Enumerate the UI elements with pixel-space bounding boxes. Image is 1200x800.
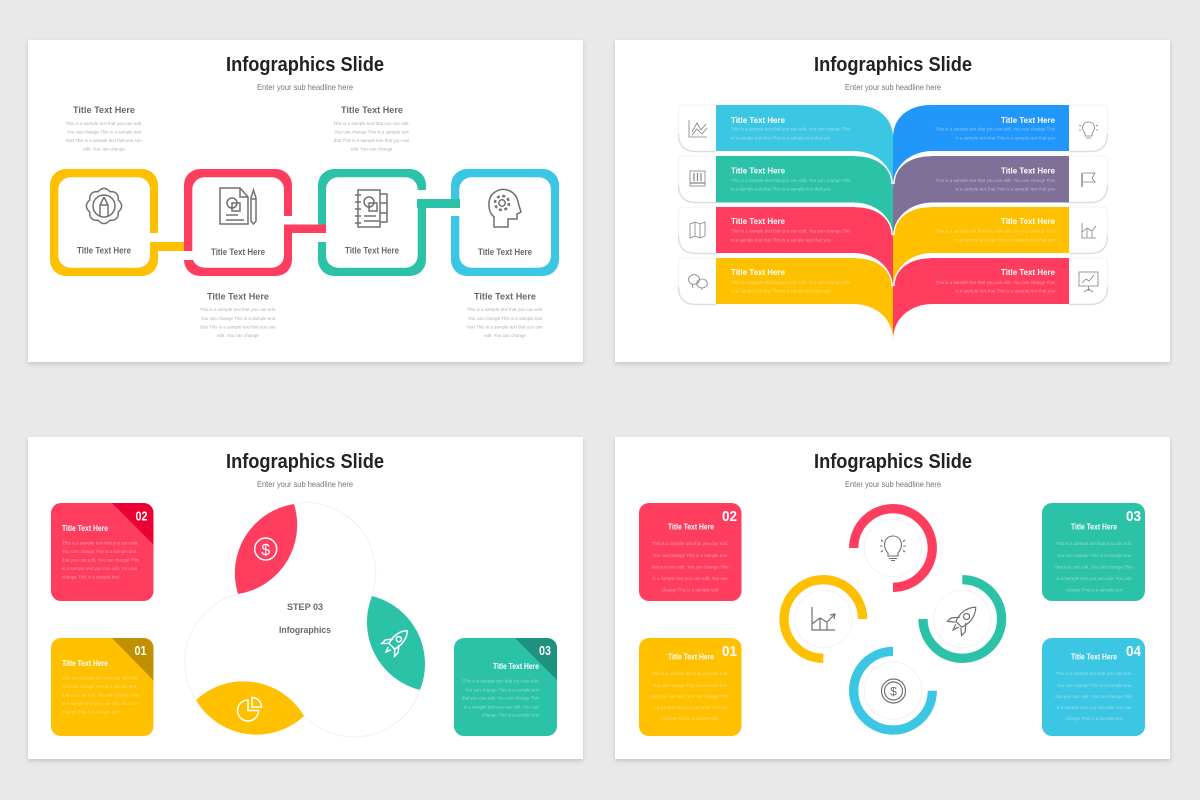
icon: map	[690, 222, 705, 238]
left ribbon text: Title Text Here	[731, 166, 785, 176]
card: 03	[1042, 503, 1145, 601]
card: step 03: This is a sample text that you can edit.	[462, 678, 539, 684]
text block: lower left: that This is a sample text that you can	[200, 324, 276, 330]
card: 03: This is a sample text that you can edit.	[1056, 541, 1132, 546]
title: Infographics Slide	[226, 451, 384, 473]
card: 01: Title Text Here	[668, 652, 714, 662]
text block: lower left: You can change This is a sample text	[201, 316, 276, 321]
text block: lower left: This is a sample text that you can edit.	[200, 307, 276, 312]
ribbon: red	[716, 207, 893, 289]
icon: pie chart	[238, 698, 262, 721]
text block: upper right: This is a sample text that you can edit.	[333, 121, 410, 126]
card: 04: is a sample text you can edit. You can	[1056, 705, 1132, 710]
card: step 01	[51, 638, 154, 736]
icon: chat bubbles	[688, 275, 707, 290]
icon: notebook	[355, 190, 387, 227]
card: 01: You can change This is a sample text	[653, 683, 728, 688]
panel: four rings	[615, 437, 1170, 759]
leaf: yellow	[196, 681, 304, 735]
title: Infographics Slide	[226, 54, 384, 76]
right ribbon text: is a sample text that This is a sample text that you	[956, 288, 1055, 294]
card: step 01: You can change This is a sample text	[62, 684, 137, 689]
icon: light bulb	[1079, 122, 1098, 138]
label: Title Text Here	[478, 247, 532, 257]
card: 01: is a sample text you can edit. You can	[652, 705, 728, 710]
card: 03: 03	[1126, 509, 1141, 525]
card: step 01: This is a sample text that you can edit.	[62, 676, 139, 680]
icon: head with gear	[489, 189, 521, 227]
panel: connected squares process	[28, 40, 583, 362]
card: 02: is a sample text you can edit. You can	[652, 576, 728, 581]
step: red square	[183, 169, 326, 276]
circle outlines	[185, 503, 420, 737]
card: 02: change This is a sample text	[662, 588, 719, 592]
card: 02: This is a sample text that you can edit.	[652, 541, 728, 546]
card: 01: that you can edit. You can change This	[651, 694, 729, 699]
card: step 02: This is a sample text that you can edit.	[62, 540, 139, 546]
text block: lower right: You can change This is a sample text	[468, 316, 543, 321]
icon: growth chart	[812, 607, 835, 630]
right ribbon text: Title Text Here	[1001, 115, 1055, 125]
card: 04: 04	[1126, 644, 1141, 660]
text block: upper left: You can change This is a sample text	[67, 130, 142, 134]
text block: upper right: edit. You can change	[351, 146, 393, 152]
card: 04: that you can edit. You can change This	[1055, 694, 1133, 699]
right ribbon text: is a sample text that This is a sample text that you	[956, 238, 1055, 242]
card: 03: is a sample text you can edit. You can	[1056, 576, 1132, 581]
right ribbon text: This is a sample text that you can edit. You can change This	[936, 126, 1056, 132]
label: Title Text Here	[77, 246, 131, 256]
card: 02: Title Text Here	[668, 522, 714, 532]
left icon tabs	[678, 105, 716, 304]
card: step 02: that you can edit. You can change This	[62, 558, 140, 562]
text block: lower left	[200, 292, 276, 338]
title: Infographics Slide	[814, 54, 972, 76]
card: step 03	[454, 638, 558, 736]
text block: upper right	[333, 105, 410, 152]
subtitle: Enter your sub headline here	[845, 479, 941, 489]
ring: red with bulb	[854, 509, 932, 587]
left ribbon text: This is a sample text that you can edit. You can change This	[731, 126, 851, 132]
card: 03: that you can edit. You can change This	[1055, 564, 1133, 570]
step: yellow square	[50, 169, 192, 276]
label: Title Text Here	[211, 247, 265, 257]
text block: upper right: You can change This is a sample text	[334, 130, 409, 134]
card: step 01: change This is a sample text	[62, 710, 120, 714]
ribbon: blue	[893, 105, 1069, 187]
text block: lower right: edit. You can change	[484, 333, 526, 338]
card: 01	[639, 638, 742, 736]
panel: book-style ribbon list	[615, 40, 1170, 362]
icon: flag	[1082, 173, 1095, 187]
card: 01: 01	[722, 644, 737, 660]
icon: rocket	[380, 624, 414, 658]
icon: rocket	[946, 600, 983, 637]
card: step 03: that you can edit. You can change This	[462, 696, 540, 700]
icon: document and pencil	[220, 188, 256, 224]
text block: lower left: edit. You can change	[217, 333, 259, 338]
right ribbon text: This is a sample text that you can edit. You can change This	[936, 280, 1056, 285]
step: teal square	[284, 169, 459, 276]
icon: sliders	[690, 171, 705, 186]
card: step 02: 02	[136, 510, 148, 524]
card: 02	[639, 503, 742, 601]
card: step 02	[51, 503, 154, 601]
step: blue square	[450, 169, 559, 276]
card: 03: Title Text Here	[1071, 522, 1117, 532]
text block: upper left: This is a sample text that you can edit.	[66, 121, 142, 126]
left ribbon text: Title Text Here	[731, 216, 785, 226]
card: step 03: You can change This is a sample text	[465, 688, 540, 692]
center label: STEP 03	[287, 602, 323, 612]
left ribbon text: is a sample text that This is a sample text that you	[731, 238, 831, 242]
card: step 02: is a sample text you can edit. You can	[62, 566, 138, 571]
label: Title Text Here	[345, 246, 399, 256]
card: 01: This is a sample text that you can edit.	[652, 671, 728, 676]
card: step 03: change This is a sample text	[482, 712, 540, 718]
subtitle: Enter your sub headline here	[257, 82, 353, 92]
text block: upper left: that This is a sample text that you can	[66, 138, 142, 143]
ring: teal with rocket	[923, 580, 1002, 658]
left ribbon text: is a sample text that This is a sample text that you	[731, 288, 831, 294]
card: 04: Title Text Here	[1071, 652, 1117, 662]
left ribbon text: This is a sample text that you can edit. You can change This	[731, 280, 851, 285]
left ribbon text: This is a sample text that you can edit. You can change This	[731, 228, 851, 234]
left ribbon text: This is a sample text that you can edit. You can change This	[731, 178, 851, 183]
subtitle: Enter your sub headline here	[257, 479, 353, 489]
card: 02: that you can edit. You can change This	[651, 564, 729, 570]
text block: upper left	[66, 105, 142, 152]
ring: cyan with coin	[854, 651, 932, 730]
card: step 02: You can change This is a sample text	[62, 549, 137, 554]
card: 03: change This is a sample text	[1066, 588, 1123, 592]
right ribbon text: is a sample text that This is a sample text that you	[956, 186, 1055, 192]
text block: lower right: This is a sample text that you can edit.	[467, 307, 543, 312]
text block: upper right: that This is a sample text that you can	[334, 138, 410, 143]
left ribbon text: is a sample text that This is a sample text that you	[731, 136, 831, 140]
panel: three-circle diagram	[28, 437, 583, 759]
left ribbon text: Title Text Here	[731, 115, 785, 125]
card: step 01: Title Text Here	[62, 658, 108, 668]
ribbon: cyan	[716, 105, 893, 187]
text block: lower right: Title Text Here	[474, 292, 536, 302]
right icon tabs	[1069, 105, 1108, 304]
title: Infographics Slide	[814, 451, 972, 473]
right ribbon text: is a sample text that This is a sample text that you	[956, 136, 1055, 140]
card: step 03: 03	[539, 644, 551, 658]
card: 03: You can change This is a sample text	[1057, 553, 1132, 558]
center label: Infographics	[279, 625, 331, 635]
card: step 03: is a sample text you can edit. You can	[464, 704, 539, 710]
right ribbon text: This is a sample text that you can edit. You can change This	[936, 228, 1056, 234]
card: 04: change This is a sample text	[1066, 716, 1123, 721]
card: step 01: is a sample text you can edit. You can	[62, 701, 138, 706]
icon: presentation board	[1079, 272, 1098, 292]
leaf: red	[235, 504, 297, 594]
ribbon: rose	[893, 258, 1069, 340]
icon: line chart	[689, 120, 707, 137]
ribbon: gold	[893, 207, 1069, 289]
card: step 02: Title Text Here	[62, 523, 108, 533]
ribbon: teal	[716, 156, 893, 238]
right ribbon text: This is a sample text that you can edit. You can change This	[936, 178, 1056, 183]
icon: dollar	[255, 538, 277, 560]
ribbon: yellow	[716, 258, 893, 340]
card: 04: You can change This is a sample text	[1057, 683, 1132, 688]
icon: bulb	[880, 536, 906, 560]
card: step 01: 01	[134, 644, 147, 658]
right ribbon text: Title Text Here	[1001, 216, 1055, 226]
text block: lower right: that This is a sample text that you can	[467, 324, 543, 330]
card: 02: You can change This is a sample text	[653, 553, 728, 558]
subtitle: Enter your sub headline here	[845, 82, 941, 92]
card: step 02: change This is a sample text	[62, 574, 120, 580]
card: 04	[1042, 638, 1145, 736]
card: 04: This is a sample text that you can edit.	[1056, 671, 1132, 676]
left ribbon text	[731, 115, 851, 294]
card: 02: 02	[722, 509, 737, 525]
icon: dollar: $	[261, 542, 270, 559]
text block: upper right: Title Text Here	[341, 105, 403, 115]
left ribbon text: Title Text Here	[731, 267, 785, 277]
card: step 01: that you can edit. You can change This	[62, 692, 140, 698]
text block: lower left: Title Text Here	[207, 292, 269, 302]
icon: gear with pencil	[86, 188, 122, 224]
icon: coin: $	[890, 684, 897, 698]
text block: upper left: edit. You can change	[83, 146, 125, 152]
ring: yellow with chart	[784, 580, 863, 658]
card: step 03: Title Text Here	[493, 661, 539, 671]
left ribbon text: is a sample text that This is a sample text that you	[731, 186, 831, 192]
ribbon: purple	[893, 156, 1069, 238]
text block: lower right	[467, 292, 543, 338]
center label	[279, 602, 331, 635]
right ribbon text: Title Text Here	[1001, 166, 1055, 176]
right ribbon text	[936, 115, 1056, 294]
card: 01: change This is a sample text	[662, 716, 719, 721]
text block: upper left: Title Text Here	[73, 105, 135, 115]
icon: growth chart	[1082, 223, 1096, 238]
right ribbon text: Title Text Here	[1001, 267, 1055, 277]
leaf: teal	[367, 596, 425, 690]
